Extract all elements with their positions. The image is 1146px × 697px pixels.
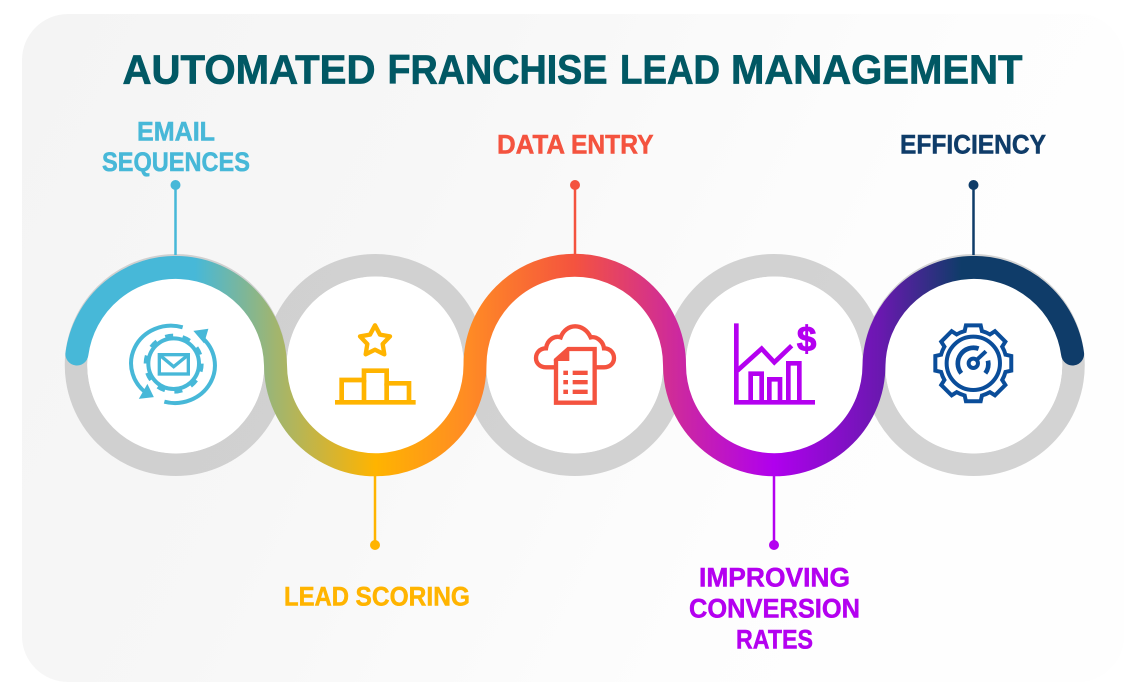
icon: cloud document: [536, 326, 614, 403]
white inner circles: [87, 276, 1062, 454]
label: improving conversion rates: IMPROVING: [699, 562, 850, 592]
icon: rising chart with dollar: $: [797, 320, 816, 359]
label: email sequences: EMAIL: [137, 116, 215, 146]
connector: efficiency: [969, 180, 978, 255]
label: lead scoring: [284, 582, 470, 612]
title: AUTOMATED: [122, 46, 376, 92]
label: data entry: ENTRY: [571, 130, 654, 160]
title: FRANCHISE: [388, 46, 608, 92]
label: data entry: [497, 130, 654, 160]
label: lead scoring: LEAD: [284, 582, 349, 612]
connector: email sequences: [171, 180, 180, 255]
grey rings: [76, 265, 1074, 465]
connector: lead scoring: [370, 475, 380, 550]
connector: data entry: [570, 180, 580, 255]
title: MANAGEMENT: [731, 46, 1022, 92]
icon: gear speedometer: [935, 325, 1011, 401]
title: [122, 46, 1022, 92]
label: improving conversion rates: [689, 562, 860, 654]
label: efficiency: EFFICIENCY: [900, 130, 1046, 160]
icon: rising chart with dollar: [736, 320, 816, 402]
icon: email cycle gear: [131, 326, 215, 403]
title: LEAD: [620, 46, 720, 92]
label: email sequences: [102, 116, 250, 177]
label: improving conversion rates: RATES: [736, 624, 813, 654]
label: data entry: DATA: [497, 130, 565, 160]
label: lead scoring: SCORING: [356, 582, 470, 612]
gradient wave ribbon: [77, 265, 1073, 465]
icon: podium with star: [335, 325, 416, 402]
label: improving conversion rates: CONVERSION: [689, 594, 860, 624]
label: email sequences: SEQUENCES: [102, 147, 250, 177]
connector: improving conversion rates: [770, 475, 778, 550]
